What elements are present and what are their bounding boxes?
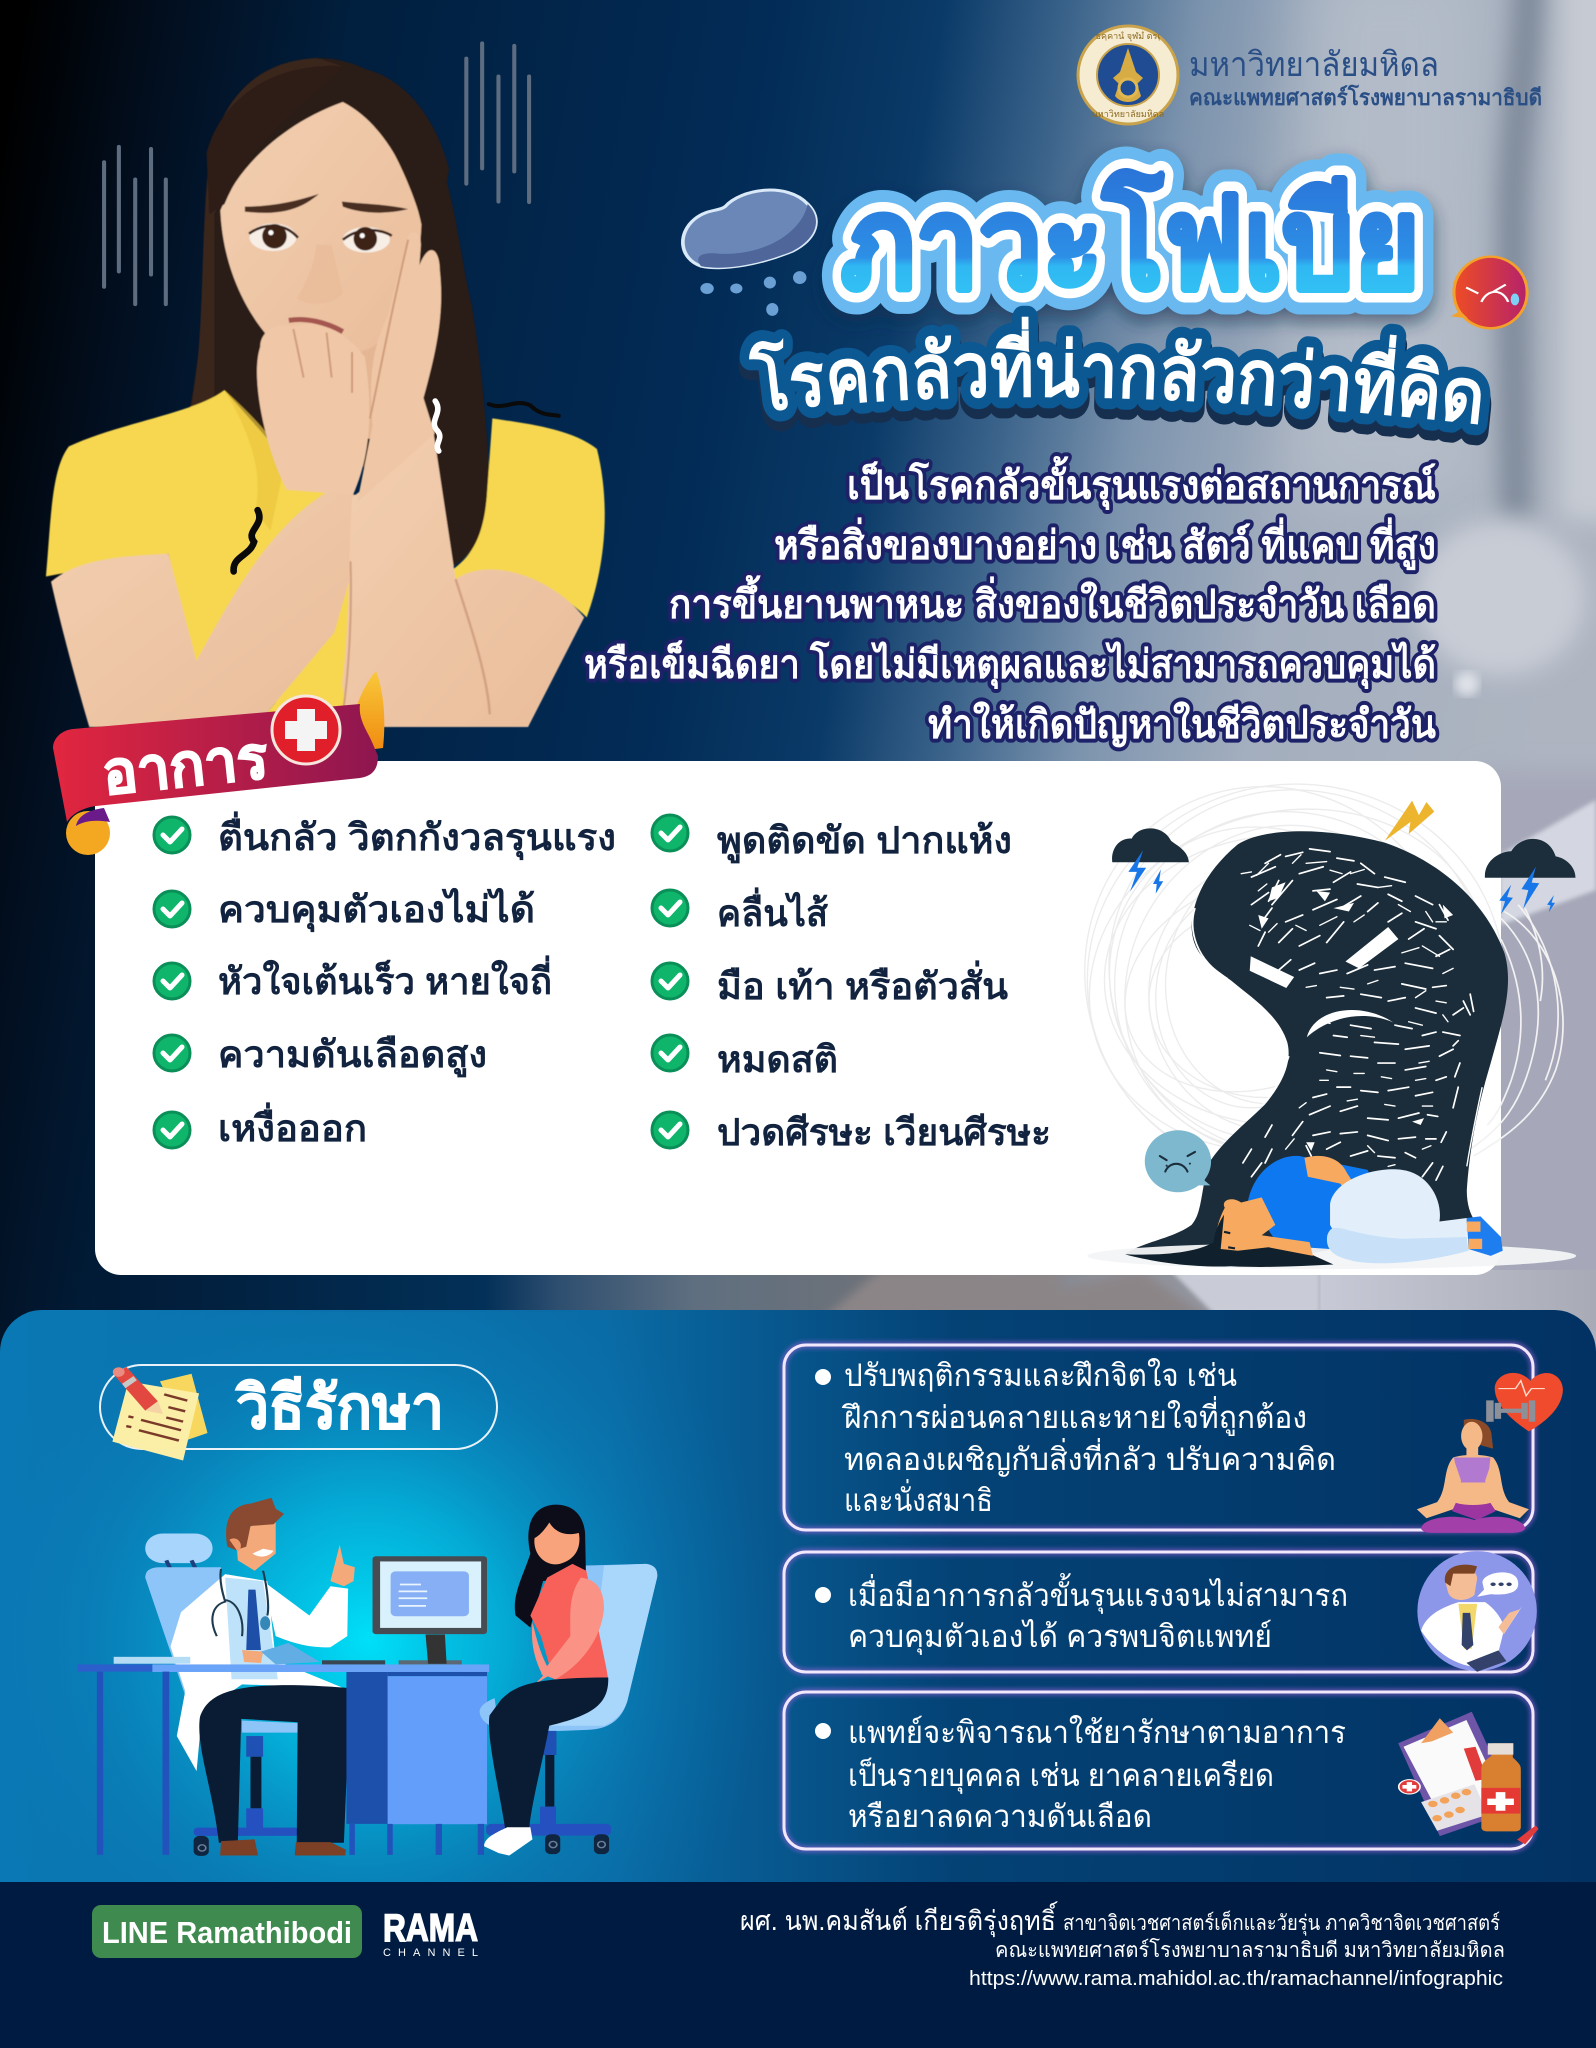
intro paragraph: ทำให้เกิดปัญหาในชีวิตประจำวัน (928, 701, 1436, 748)
symptom list: หัวใจเต้นเร็ว หายใจถี่ (218, 955, 552, 1002)
icon: clipboard and medicine (1398, 1712, 1517, 1836)
LINE badge (92, 1905, 362, 1958)
icon: storm clouds (1112, 828, 1189, 862)
LINE badge: LINE Ramathibodi (102, 1915, 352, 1950)
anxiety lines (104, 43, 529, 304)
sad bubble (1145, 1130, 1211, 1192)
university name: คณะแพทยศาสตร์โรงพยาบาลรามาธิบดี (1189, 84, 1542, 110)
intro paragraph: เป็นโรคกลัวขั้นรุนแรงต่อสถานการณ์ (847, 456, 1436, 511)
icon: yoga woman (1464, 1419, 1493, 1449)
subtitle: โรคกลัวที่น่ากลัวกว่าที่คิด (740, 306, 1490, 436)
box: see psychiatrist: เมื่อมีอาการกลัวขั้นรุนแรงจนไม่สามารถ (848, 1573, 1348, 1615)
treatment boxes (784, 1345, 1533, 1849)
check icons (154, 815, 688, 1148)
credits: https://www.rama.mahidol.ac.th/ramachannel/infographic (969, 1968, 1503, 1990)
arms (51, 492, 357, 727)
credits: สาขาจิตเวชศาสตร์เด็กและวัยรุ่น ภาควิชาจิตเวชศาสตร์ (1063, 1909, 1500, 1936)
face (220, 102, 421, 356)
intro paragraph: การขึ้นยานพาหนะ สิ่งของในชีวิตประจำวัน เลือด (669, 575, 1436, 627)
RAMA channel logo: CHANNEL (383, 1947, 478, 1959)
symptom list: มือ เท้า หรือตัวสั่น (717, 960, 1008, 1007)
monitor (322, 1660, 385, 1664)
icon: heart with dumbbell (1495, 1373, 1563, 1431)
icon: notes and pencil (112, 1366, 208, 1460)
RAMA channel logo: RAMA (383, 1907, 478, 1950)
symptom list: คลื่นไส้ (717, 887, 828, 934)
symptom list: หมดสติ (717, 1039, 838, 1080)
box: medication: เป็นรายบุคคล เช่น ยาคลายเครียด (848, 1757, 1274, 1795)
panel: treatment section background (0, 1310, 1596, 1930)
symptom list: พูดติดขัด ปากแห้ง (717, 820, 1012, 864)
illustration: doctor and patient (78, 1498, 657, 1856)
subtitle: โรคกลัวที่น่ากลัวกว่าที่คิด (738, 322, 1492, 446)
box: medication: หรือยาลดความดันเลือด (848, 1799, 1152, 1834)
hair (189, 58, 490, 569)
footer band (0, 1882, 1596, 2048)
ground shadow (1087, 1243, 1576, 1269)
credits: ผศ. นพ.คมสันต์ เกียรติรุ่งฤทธิ์ (740, 1901, 1058, 1938)
box: see psychiatrist (784, 1552, 1533, 1672)
symptom list: ความดันเลือดสูง (218, 1034, 487, 1078)
credits (740, 1901, 1505, 1990)
symptom list: เหงื่อออก (218, 1102, 367, 1149)
RAMA channel logo (383, 1907, 478, 1959)
scribble rings (1015, 717, 1541, 1243)
box: medication (784, 1692, 1533, 1849)
university logo: มหาวิทยาลัยมหิดล (1092, 109, 1164, 119)
biting fist (257, 324, 369, 495)
squiggles (434, 401, 440, 451)
university logo: ธคฺคานํ จุฬมํ ตรเฺ (1096, 31, 1160, 42)
doctor (170, 1574, 343, 1771)
icon: crying speech bubble (1451, 257, 1527, 328)
neck (265, 332, 388, 439)
background: strip under symptoms panel (95, 1270, 1596, 1330)
icon: doctor in circle (1417, 1551, 1537, 1671)
box: behaviour therapy (784, 1345, 1533, 1530)
box: medication: แพทย์จะพิจารณาใช้ยารักษาตามอาการ (848, 1715, 1346, 1750)
university name (1189, 46, 1542, 110)
shirt (46, 390, 605, 727)
desk (78, 1664, 152, 1672)
photo: worried woman (46, 43, 605, 727)
icon: yellow lightning (1385, 801, 1434, 841)
intro paragraph (584, 456, 1436, 748)
ribbon: symptoms heading (53, 671, 384, 855)
box: behaviour therapy: ปรับพฤติกรรมและฝึกจิตใจ เช่น (844, 1358, 1237, 1393)
title: ภาวะโฟเบีย (841, 169, 1420, 316)
box: behaviour therapy: ทดลองเผชิญกับสิ่งที่กลัว ปรับความคิด (844, 1438, 1336, 1477)
subtitle: โรคกลัวที่น่ากลัวกว่าที่คิด (749, 316, 1481, 424)
illustration: scribble monster over collapsed woman (1015, 717, 1576, 1269)
intro paragraph: หรือสิ่งของบางอย่าง เช่น สัตว์ ที่แคบ ที่สูง (774, 517, 1436, 570)
title: ภาวะโฟเบีย (841, 169, 1420, 316)
patient (515, 1505, 586, 1628)
icon: rain cloud (683, 190, 816, 316)
cheek hand (357, 232, 441, 503)
title: ภาวะโฟเบีย (841, 169, 1420, 316)
scribble gaps (1243, 849, 1474, 1189)
box: behaviour therapy: ฝึกการผ่อนคลายและหายใจที่ถูกต้อง (841, 1396, 1307, 1436)
box: behaviour therapy: และนั่งสมาธิ (844, 1479, 993, 1518)
intro paragraph: หรือเข็มฉีดยา โดยไม่มีเหตุผลและไม่สามารถควบคุมได้ (584, 639, 1436, 690)
credits: คณะแพทยศาสตร์โรงพยาบาลรามาธิบดี มหาวิทยาลัยมหิดล (995, 1938, 1505, 1962)
brows and eyes (245, 194, 319, 213)
ribbon: symptoms heading: อาการ (99, 724, 271, 807)
doctor chair (145, 1534, 213, 1563)
university logo (1078, 26, 1178, 124)
patient chair (516, 1564, 657, 1733)
angry eyes and mouth (1250, 956, 1294, 988)
background: blurred photo area (0, 0, 1596, 1360)
symptom list: ควบคุมตัวเองไม่ได้ (218, 887, 535, 933)
panel: symptoms (95, 761, 1501, 1275)
icons: yoga, doctor, medicine (1398, 1373, 1563, 1844)
heading: treatment (100, 1365, 497, 1461)
lying woman (1125, 1242, 1333, 1267)
heading: treatment: วิธีรักษา (235, 1374, 444, 1441)
symptom list (218, 811, 1051, 1153)
box: see psychiatrist: ควบคุมตัวเองได้ ควรพบจิตแพทย์ (848, 1619, 1272, 1656)
university name: มหาวิทยาลัยมหิดล (1189, 46, 1439, 84)
symptom list: ปวดศีรษะ เวียนศีรษะ (717, 1112, 1051, 1153)
scribble body (1125, 831, 1508, 1264)
symptom list: ตื่นกลัว วิตกกังวลรุนแรง (218, 811, 616, 861)
icon: plus badge (272, 696, 340, 764)
